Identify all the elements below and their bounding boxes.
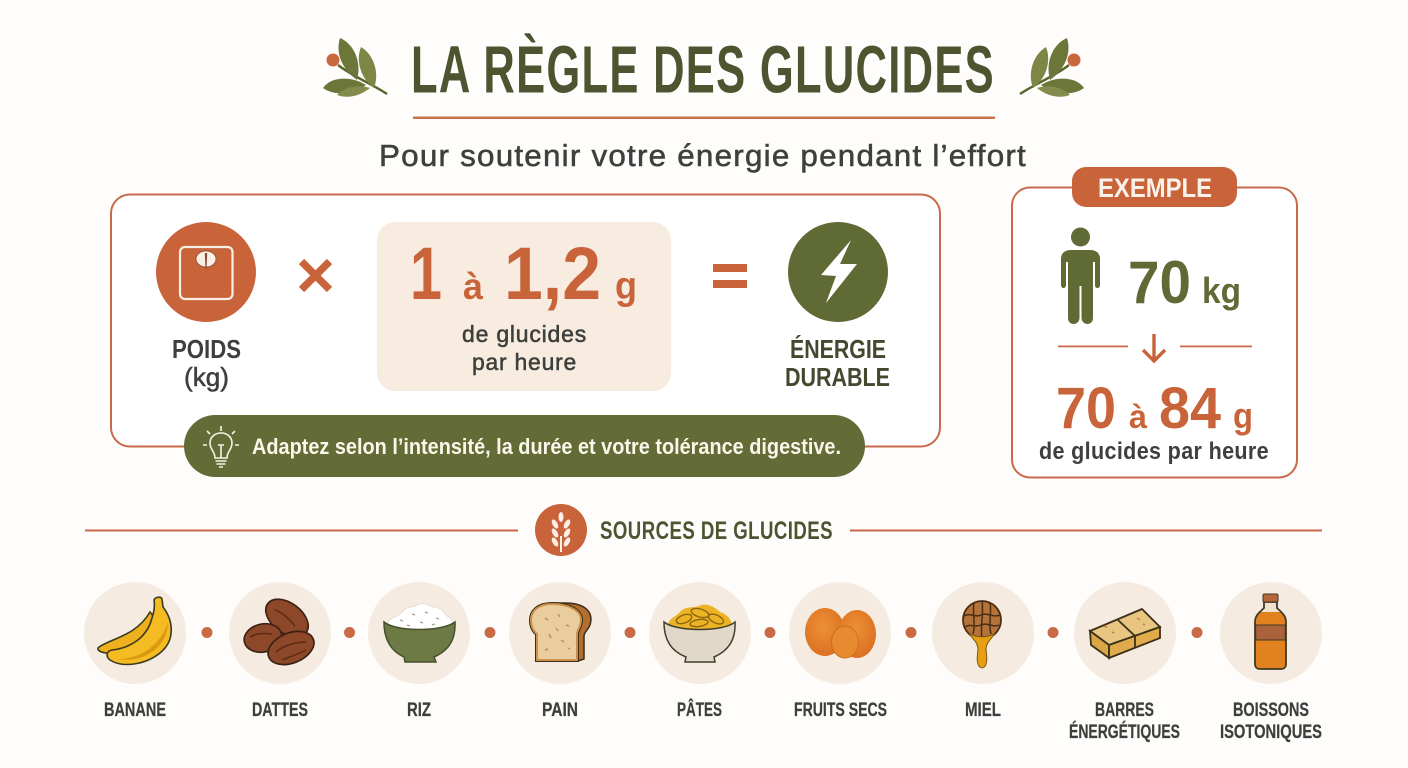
value: 70 à 84 g: g: [1233, 395, 1253, 436]
panel: dose: à: [463, 266, 483, 307]
food: dattes: DATTES: [252, 700, 308, 721]
icon: person: [1061, 228, 1100, 324]
panel: example: [1012, 167, 1297, 478]
food: barres énergétiques: BARRES: [1095, 700, 1154, 721]
food: fruits secs: [789, 582, 891, 721]
food: boissons isotoniques: [1220, 582, 1322, 743]
food: pâtes: PÂTES: [677, 699, 722, 721]
callout: tip: Adaptez selon l’intensité, la durée et votre tolérance digestive.: [252, 434, 841, 459]
subtitle: Pour soutenir votre énergie pendant l’effort: [379, 138, 1027, 173]
label: poids: (kg): [184, 362, 229, 392]
food: fruits secs: FRUITS SECS: [794, 700, 887, 721]
label: énergie durable: DURABLE: [785, 362, 890, 392]
section heading: sources: [85, 504, 1322, 556]
label: poids: [172, 334, 241, 392]
value: 70 kg: [1128, 249, 1241, 316]
label: énergie durable: ÉNERGIE: [790, 334, 886, 364]
food: barres énergétiques: [1069, 582, 1180, 743]
arrow: down: [1143, 334, 1165, 361]
food: pain: [509, 582, 611, 721]
panel: dose: 1,2: [504, 232, 601, 315]
value: 70 à 84 g: [1056, 376, 1253, 441]
section heading: sources: SOURCES DE GLUCIDES: [600, 517, 833, 545]
food: barres énergétiques: ÉNERGÉTIQUES: [1069, 721, 1180, 743]
food: banane: BANANE: [104, 700, 166, 721]
icon: light bulb: [203, 426, 239, 467]
food: pâtes: [649, 582, 751, 721]
value: 70 à 84 g: 84: [1159, 376, 1221, 441]
food: pain: PAIN: [542, 700, 578, 721]
icon: left olive sprig: [323, 38, 387, 97]
food: miel: [932, 582, 1034, 721]
food: riz: [368, 582, 470, 721]
title: LA RÈGLE DES GLUCIDES: [411, 32, 995, 108]
value: 70 kg: 70: [1128, 249, 1191, 316]
badge: exemple: EXEMPLE: [1098, 173, 1212, 203]
icon: multiply sign: [302, 262, 330, 290]
icon: energy bolt: [788, 222, 888, 322]
caption: example unit: de glucides par heure: [1039, 438, 1269, 465]
icon: equals sign: [713, 264, 747, 288]
value: 70 à 84 g: à: [1129, 398, 1148, 435]
label: énergie durable: [785, 334, 890, 392]
callout: tip: [184, 415, 865, 477]
panel: dose: [377, 222, 671, 391]
value: 70 kg: kg: [1202, 270, 1241, 311]
icon: right olive sprig: [1020, 38, 1084, 97]
panel: dose: 1: [410, 232, 442, 315]
panel: formula: [111, 194, 940, 477]
food: dattes: [229, 582, 331, 721]
food: miel: MIEL: [965, 700, 1001, 721]
value: 70 à 84 g: 70: [1056, 376, 1116, 441]
food: riz: RIZ: [407, 700, 431, 721]
panel: dose: g: [615, 265, 637, 308]
badge: exemple: [1072, 167, 1237, 207]
icon: wheat: [550, 512, 572, 552]
label: poids: POIDS: [172, 334, 241, 364]
food: boissons isotoniques: ISOTONIQUES: [1220, 722, 1322, 743]
food: banane: [84, 582, 186, 721]
panel: dose: de glucides: [462, 321, 587, 347]
icon: weighing scale: [156, 222, 256, 322]
food: boissons isotoniques: BOISSONS: [1233, 700, 1309, 721]
panel: dose: par heure: [472, 349, 577, 375]
